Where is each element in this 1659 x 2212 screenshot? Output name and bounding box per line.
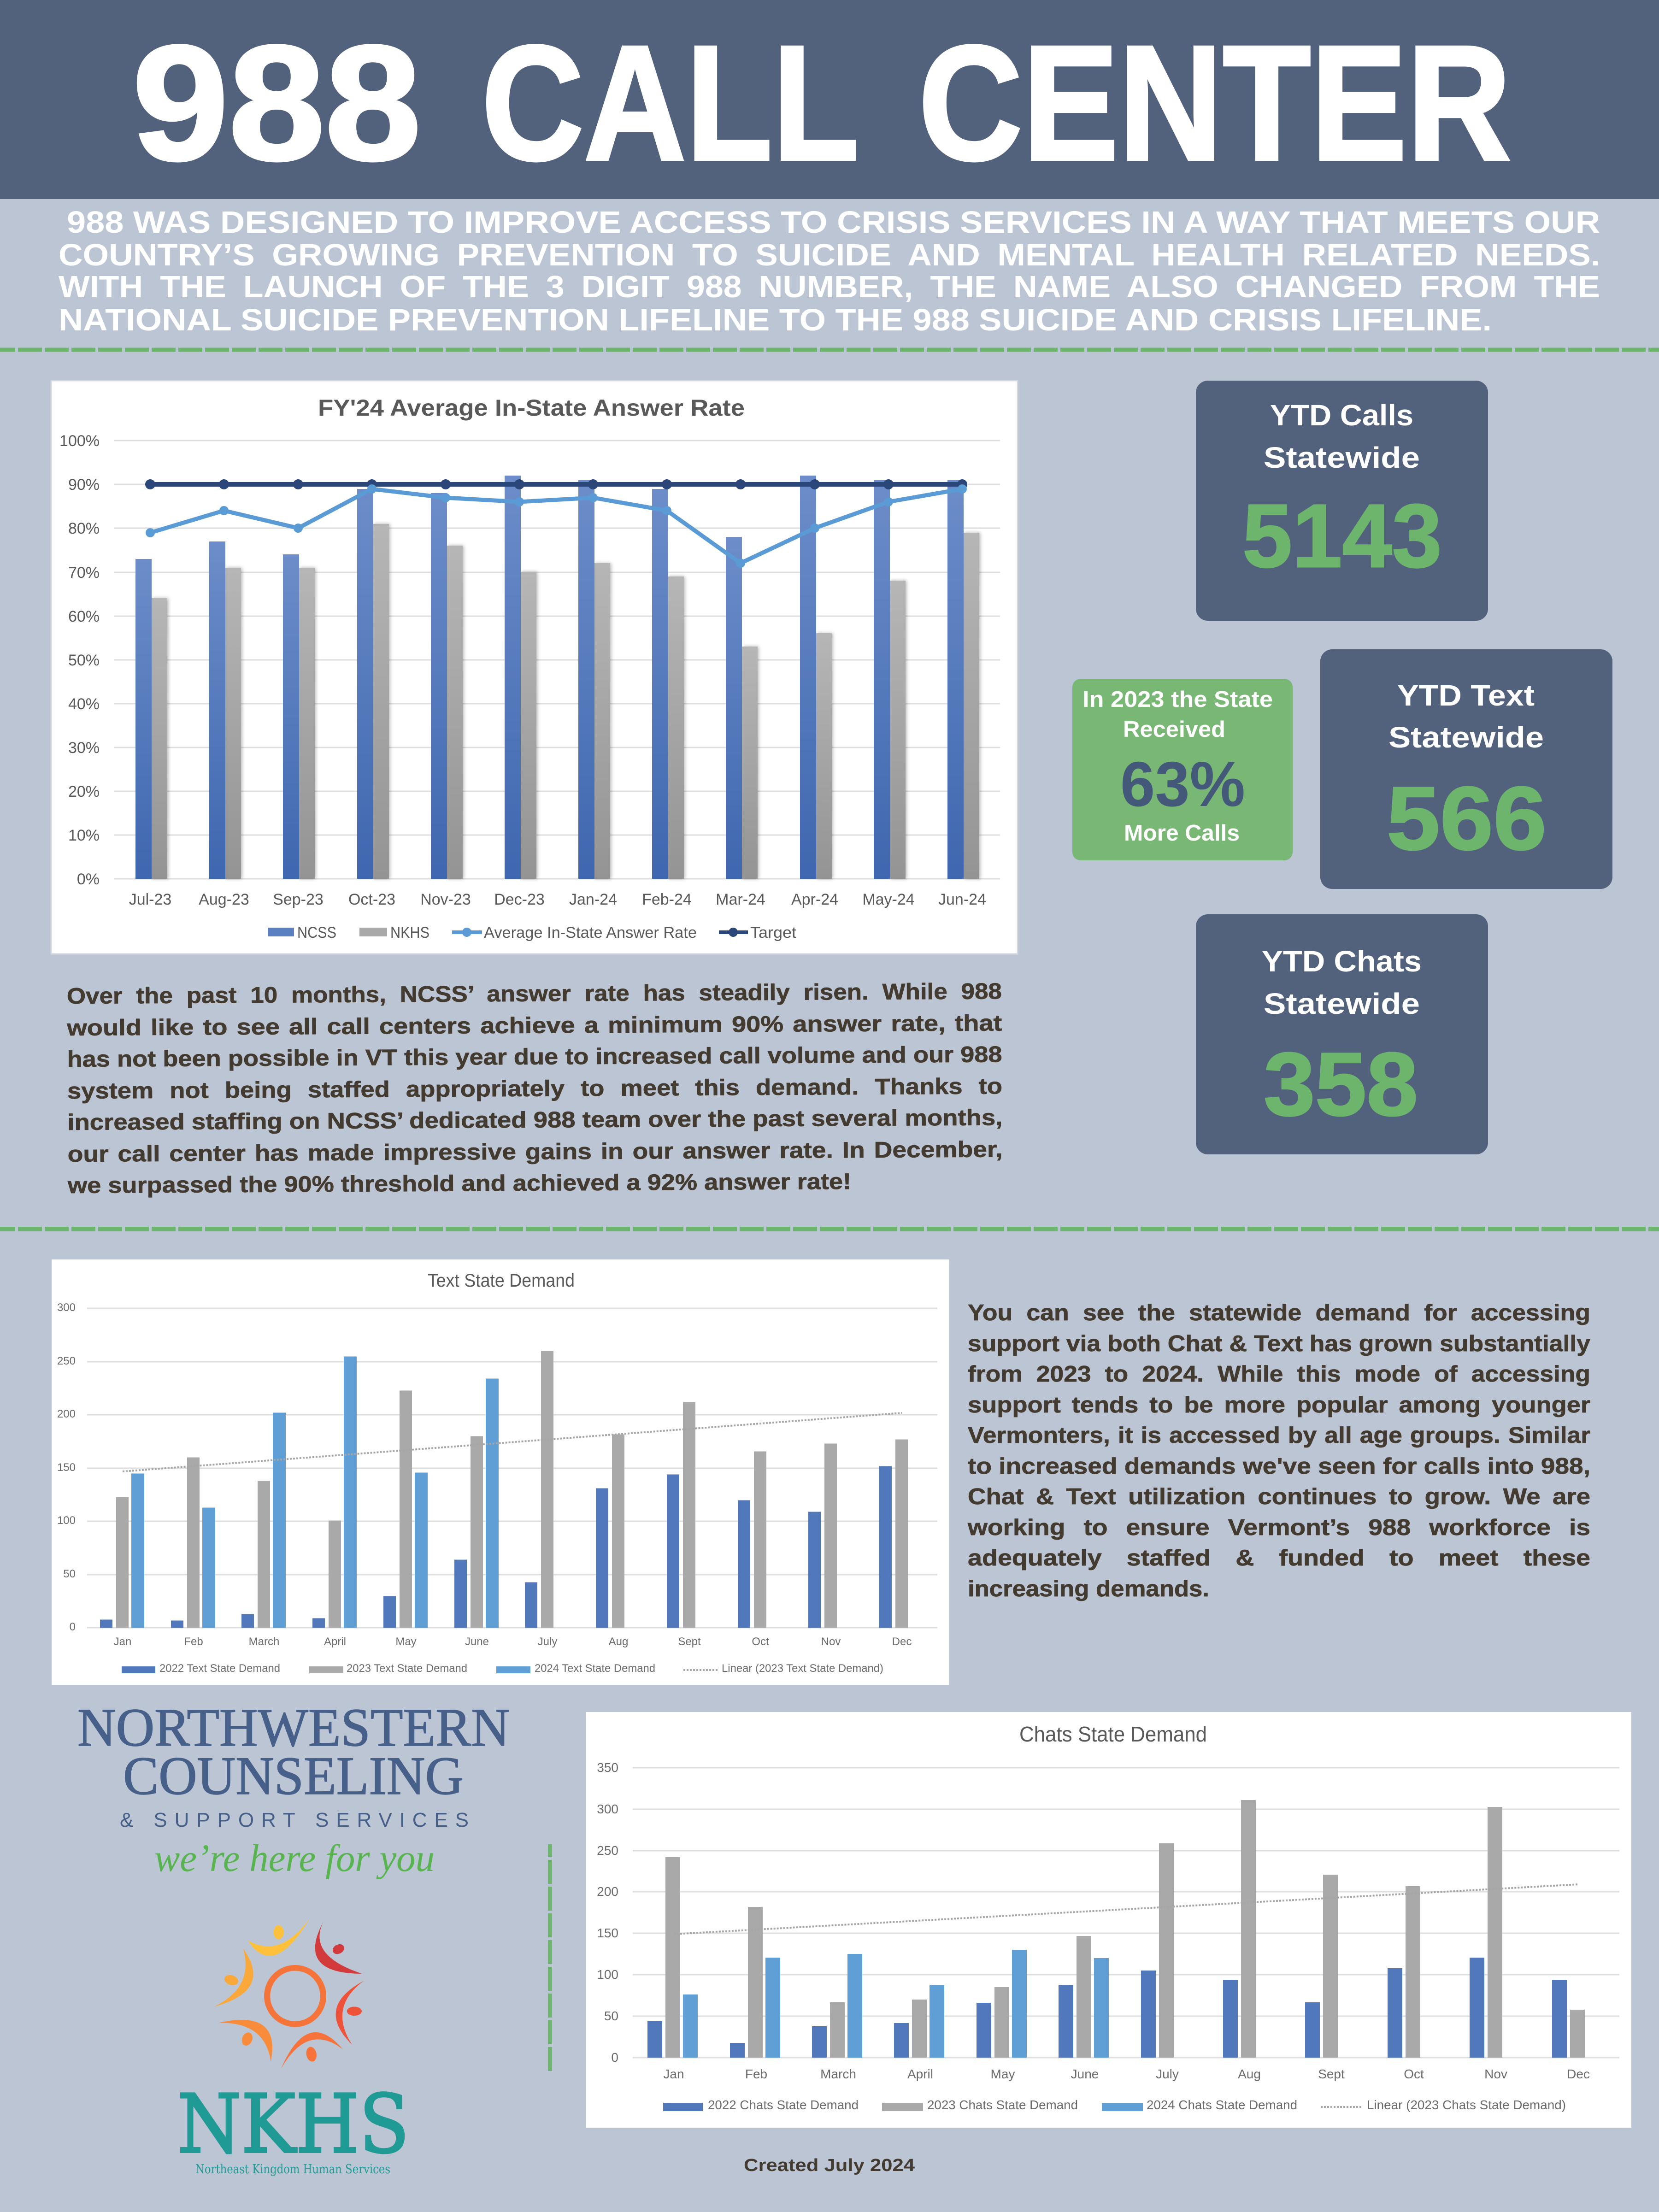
- x axis labels: July: [1156, 2067, 1179, 2081]
- intro text block: WITH THE LAUNCH OF THE 3 DIGIT 988 NUMBER, THE NAME ALSO CHANGED FROM THE: [59, 270, 1600, 304]
- x axis labels: July: [538, 1635, 557, 1648]
- text block: answer rate commentary: system not being staffed appropriately to meet this demand. Thanks to: [67, 1074, 1002, 1104]
- chart title: Chats State Demand: [1019, 1722, 1207, 1746]
- x axis labels: March: [820, 2067, 856, 2081]
- 2024 bars: [683, 1950, 1109, 2058]
- x axis labels: Dec: [892, 1635, 912, 1648]
- KPI card: YTD calls: Statewide: [1264, 441, 1420, 474]
- x axis labels: Feb-24: [642, 891, 692, 908]
- y axis and gridlines: 100%: [59, 432, 100, 450]
- KPI card: YTD text: YTD Text: [1397, 679, 1535, 712]
- x axis labels: April: [907, 2067, 933, 2081]
- chart title: Text State Demand: [428, 1271, 575, 1291]
- y axis and gridlines: 50%: [68, 652, 100, 669]
- KPI card: YTD chats: [1196, 914, 1488, 1154]
- 2023 bars: [116, 1351, 908, 1628]
- y axis and gridlines: 150: [57, 1461, 76, 1474]
- x axis labels: Dec: [1567, 2067, 1590, 2081]
- legend: Linear (2023 Chats State Demand): [1367, 2098, 1566, 2112]
- legend: NCSS: [297, 924, 336, 941]
- text block: answer rate commentary: Over the past 10 months, NCSS’ answer rate has steadily risen. While 988: [67, 979, 1002, 1009]
- text block: answer rate commentary: our call center has made impressive gains in our answer rate. In December,: [68, 1137, 1003, 1167]
- KPI card: YTD calls: 5143: [1242, 486, 1442, 586]
- x axis labels: March: [249, 1635, 279, 1648]
- header banner: [0, 0, 1659, 199]
- x axis labels: Oct-23: [348, 891, 395, 908]
- 2022 bars: [647, 1958, 1567, 2058]
- legend: 2024 Chats State Demand: [1147, 2098, 1297, 2112]
- x axis labels: Dec-23: [494, 891, 545, 908]
- text block: chat and text demand commentary: support via both Chat & Text has grown substantially: [968, 1331, 1590, 1356]
- x axis labels: Sep-23: [273, 891, 324, 908]
- x axis labels: Jan: [663, 2067, 684, 2081]
- y axis and gridlines: 200: [597, 1884, 618, 1899]
- linear trend line: [674, 1884, 1578, 1934]
- text block: chat and text demand commentary: to increased demands we've seen for calls into 988,: [968, 1454, 1590, 1479]
- x axis labels: Sept: [1318, 2067, 1345, 2081]
- callout: 63% more calls: 63%: [1120, 749, 1245, 820]
- x axis labels: Jun-24: [938, 891, 986, 908]
- x axis labels: Mar-24: [716, 891, 765, 908]
- title: 988: [132, 12, 421, 194]
- KPI card: YTD chats: Statewide: [1264, 987, 1420, 1020]
- y axis and gridlines: 300: [57, 1301, 76, 1314]
- x axis labels: Sept: [678, 1635, 701, 1648]
- 2024 bars: [131, 1357, 499, 1628]
- text block: chat and text demand commentary: adequately staffed & funded to meet these: [968, 1546, 1590, 1571]
- linear trend line: [123, 1413, 902, 1471]
- legend: [268, 924, 797, 941]
- x axis labels: Oct: [1404, 2067, 1424, 2081]
- x axis labels: [663, 2067, 1590, 2081]
- y axis and gridlines: 200: [57, 1408, 76, 1420]
- x axis labels: Jan: [114, 1635, 131, 1648]
- x axis labels: [129, 891, 986, 908]
- y axis and gridlines: 30%: [68, 739, 100, 757]
- legend: [663, 2098, 1566, 2112]
- logo: NKHS sun mark: [214, 1918, 364, 2069]
- text block: chat and text demand commentary: Vermonters, it is accessed by all age groups. Similar: [968, 1423, 1590, 1448]
- x axis labels: June: [1071, 2067, 1099, 2081]
- x axis labels: May-24: [862, 891, 915, 908]
- y axis and gridlines: 70%: [68, 564, 100, 582]
- y axis and gridlines: 100: [57, 1514, 76, 1527]
- KPI card: YTD chats: YTD Chats: [1262, 945, 1422, 978]
- y axis and gridlines: 90%: [68, 476, 100, 494]
- text block: answer rate commentary: [66, 979, 1003, 1198]
- x axis labels: June: [465, 1635, 489, 1648]
- y axis and gridlines: 0%: [77, 871, 100, 888]
- text block: answer rate commentary: would like to see all call centers achieve a minimum 90% answer rate, that: [66, 1011, 1002, 1041]
- logo: Northwestern Counseling: we’re here for you: [154, 1837, 435, 1880]
- text block: answer rate commentary: we surpassed the 90% threshold and achieved a 92% answer rate!: [67, 1169, 851, 1198]
- y axis and gridlines: 50: [604, 2009, 618, 2023]
- x axis labels: Aug: [609, 1635, 628, 1648]
- legend: 2024 Text State Demand: [535, 1662, 655, 1675]
- logo: NKHS wordmark: Northeast Kingdom Human Services: [195, 2162, 390, 2177]
- x axis labels: Jul-23: [129, 891, 171, 908]
- y axis and gridlines: 350: [597, 1760, 618, 1775]
- target line: [145, 479, 967, 489]
- x axis labels: Nov-23: [420, 891, 471, 908]
- text block: chat and text demand commentary: increasing demands.: [968, 1577, 1209, 1601]
- y axis and gridlines: [597, 1760, 1619, 2065]
- x axis labels: [114, 1635, 912, 1648]
- text block: chat and text demand commentary: [967, 1300, 1590, 1601]
- callout: 63% more calls: In 2023 the State: [1082, 687, 1273, 712]
- title: [132, 12, 1511, 194]
- x axis labels: Jan-24: [569, 891, 617, 908]
- KPI card: YTD text: 566: [1387, 768, 1547, 869]
- x axis labels: Nov: [821, 1635, 841, 1648]
- y axis and gridlines: [57, 1301, 937, 1633]
- text block: answer rate commentary: has not been possible in VT this year due to increased call volume and our 988: [67, 1042, 1002, 1072]
- x axis labels: Oct: [752, 1635, 769, 1648]
- KPI card: YTD text: Statewide: [1388, 721, 1544, 754]
- y axis and gridlines: 40%: [68, 695, 100, 713]
- title: CENTER: [918, 12, 1511, 194]
- logo: Northwestern Counseling: [77, 1697, 510, 1880]
- x axis labels: Aug-23: [199, 891, 249, 908]
- text block: answer rate commentary: increased staffing on NCSS’ dedicated 988 team over the past several months,: [67, 1105, 1002, 1135]
- text block: chat and text demand commentary: You can see the statewide demand for accessing: [968, 1300, 1590, 1325]
- KPI card: YTD calls: [1196, 381, 1488, 621]
- text block: chat and text demand commentary: support tends to be more popular among younger: [968, 1393, 1590, 1418]
- y axis and gridlines: 60%: [68, 608, 100, 625]
- average in-state answer rate line: [146, 484, 967, 568]
- x axis labels: May: [395, 1635, 417, 1648]
- x axis labels: May: [991, 2067, 1015, 2081]
- x axis labels: April: [324, 1635, 346, 1648]
- 2022 bars: [100, 1466, 892, 1628]
- y axis and gridlines: 250: [597, 1843, 618, 1858]
- x axis labels: Nov: [1484, 2067, 1507, 2081]
- KPI card: YTD chats: 358: [1264, 1034, 1418, 1135]
- y axis and gridlines: [59, 432, 1000, 888]
- x axis labels: Aug: [1238, 2067, 1261, 2081]
- callout: 63% more calls: [1072, 679, 1293, 860]
- chart title: FY'24 Average In-State Answer Rate: [318, 395, 745, 421]
- y axis and gridlines: 50: [63, 1568, 76, 1580]
- created date note: Created July 2024: [744, 2156, 915, 2175]
- chart: FY'24 average in-state answer rate: [51, 381, 1018, 954]
- legend: 2023 Text State Demand: [347, 1662, 467, 1675]
- legend: [122, 1662, 883, 1675]
- legend: Average In-State Answer Rate: [484, 924, 697, 941]
- y axis and gridlines: 150: [597, 1926, 618, 1940]
- y axis and gridlines: 0: [611, 2050, 618, 2065]
- chart: chats state demand: [586, 1712, 1631, 2128]
- y axis and gridlines: 250: [57, 1355, 76, 1367]
- logo: NKHS wordmark: NKHS: [177, 2078, 409, 2171]
- x axis labels: Apr-24: [791, 891, 838, 908]
- x axis labels: Feb: [184, 1635, 203, 1648]
- logo: Northwestern Counseling: & SUPPORT SERVICES: [120, 1809, 469, 1831]
- y axis and gridlines: 300: [597, 1802, 618, 1816]
- y axis and gridlines: 0: [70, 1621, 76, 1633]
- legend: Target: [750, 924, 797, 941]
- legend: 2023 Chats State Demand: [927, 2098, 1078, 2112]
- x axis labels: Feb: [745, 2067, 767, 2081]
- NCSS bars: [135, 476, 964, 879]
- callout: 63% more calls: Received: [1123, 717, 1225, 742]
- legend: 2022 Text State Demand: [159, 1662, 280, 1675]
- 2023 bars: [665, 1800, 1585, 2058]
- legend: NKHS: [390, 924, 429, 941]
- KPI card: YTD calls: YTD Calls: [1270, 399, 1413, 432]
- KPI card: YTD text: [1320, 649, 1612, 889]
- text block: chat and text demand commentary: working to ensure Vermont’s 988 workforce is: [967, 1515, 1590, 1540]
- y axis and gridlines: 80%: [68, 520, 100, 537]
- logo: Northwestern Counseling: NORTHWESTERN: [77, 1697, 510, 1758]
- y axis and gridlines: 20%: [68, 783, 100, 800]
- callout: 63% more calls: More Calls: [1124, 821, 1240, 846]
- text block: chat and text demand commentary: Chat & Text utilization continues to grow. We are: [968, 1484, 1590, 1509]
- y axis and gridlines: 10%: [68, 827, 100, 844]
- intro text block: NATIONAL SUICIDE PREVENTION LIFELINE TO THE 988 SUICIDE AND CRISIS LIFELINE.: [59, 303, 1492, 337]
- intro text block: COUNTRY’S GROWING PREVENTION TO SUICIDE AND MENTAL HEALTH RELATED NEEDS.: [59, 238, 1600, 272]
- title: CALL: [482, 12, 859, 194]
- legend: 2022 Chats State Demand: [708, 2098, 859, 2112]
- intro text block: 988 WAS DESIGNED TO IMPROVE ACCESS TO CRISIS SERVICES IN A WAY THAT MEETS OUR: [67, 205, 1600, 240]
- intro text block: [59, 205, 1600, 337]
- text block: chat and text demand commentary: from 2023 to 2024. While this mode of accessing: [968, 1362, 1590, 1387]
- y axis and gridlines: 100: [597, 1967, 618, 1982]
- NKHS bars: [152, 524, 979, 879]
- chart: text state demand: [52, 1259, 949, 1685]
- legend: Linear (2023 Text State Demand): [722, 1662, 883, 1675]
- logo: Northwestern Counseling: COUNSELING: [123, 1746, 464, 1806]
